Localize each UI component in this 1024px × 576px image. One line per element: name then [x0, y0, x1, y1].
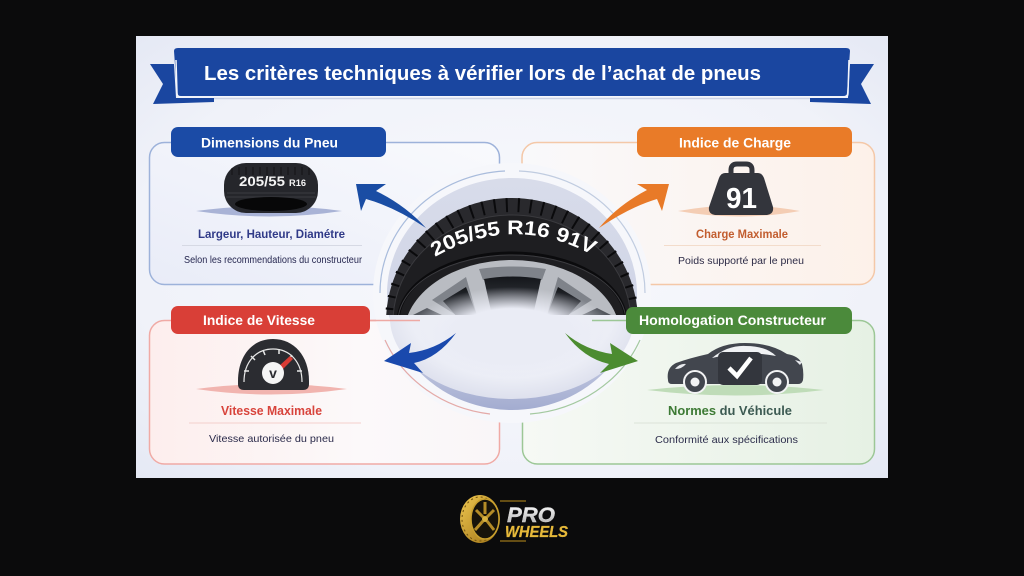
icon: weight 91 [678, 164, 800, 216]
heading: indice de vitesse [171, 306, 370, 334]
heading: indice de charge [637, 127, 852, 157]
connector line: vitesse [370, 320, 420, 322]
tire [386, 198, 638, 315]
description: charge: Poids supporté par le pneu [678, 255, 804, 267]
label: vitesse maximale: Vitesse Maximale [221, 404, 322, 418]
lower highlight disc [390, 237, 634, 399]
label: normes du véhicule: Normes du Véhicule [668, 404, 792, 418]
arrow: to homologation [565, 333, 638, 373]
arrow: to vitesse [384, 333, 456, 373]
description: homologation: Conformité aux spécifications [655, 434, 798, 446]
connector line: homologation [592, 320, 626, 322]
icon: weight 91: 91 [726, 183, 757, 215]
icon: tire 205/55 R16: 205/55 [239, 173, 285, 189]
arrow: to charge [599, 184, 669, 228]
panel: indice de charge [522, 127, 874, 284]
label: charge maximale: Charge Maximale [696, 227, 788, 241]
center tire medallion [373, 163, 651, 423]
icon: tire 205/55 R16: R16 [289, 178, 306, 189]
tire size text: 205/55 R16 91V [430, 220, 598, 256]
heading: indice de charge: Indice de Charge [679, 134, 791, 150]
icon: tire 205/55 R16 [196, 163, 342, 216]
label: largeur, hauteur, diamètre: Largeur, Hauteur, Diamétre [198, 227, 345, 241]
rim fade [408, 287, 616, 383]
alloy rim [408, 260, 616, 315]
icon: speedometer [196, 339, 347, 394]
logo wordmark: PRO [507, 504, 555, 527]
title: Les critères techniques à vérifier lors de l’achat de pneus [204, 63, 761, 85]
arrow: to dimensions [356, 184, 426, 228]
logo: pro wheels: WHEELS [505, 524, 568, 541]
heading: homologation constructeur [626, 307, 852, 334]
description: dimensions: Selon les recommendations du constructeur [184, 255, 363, 266]
heading: homologation constructeur: Homologation Constructeur [639, 312, 827, 328]
heading: dimensions du pneu: Dimensions du Pneu [201, 134, 338, 150]
panel: indice de vitesse [150, 320, 500, 464]
panel: dimensions du pneu [150, 127, 500, 284]
heading: indice de vitesse: Indice de Vitesse [203, 312, 315, 328]
icon: car with check mark [647, 343, 824, 396]
heading: dimensions du pneu [171, 127, 386, 157]
logo: pro wheels [460, 495, 568, 543]
infographic card [136, 36, 888, 478]
icon: speedometer: v [269, 365, 277, 381]
panel: homologation constructeur [522, 320, 874, 464]
description: vitesse: Vitesse autorisée du pneu [209, 433, 334, 445]
banner title [150, 48, 874, 104]
